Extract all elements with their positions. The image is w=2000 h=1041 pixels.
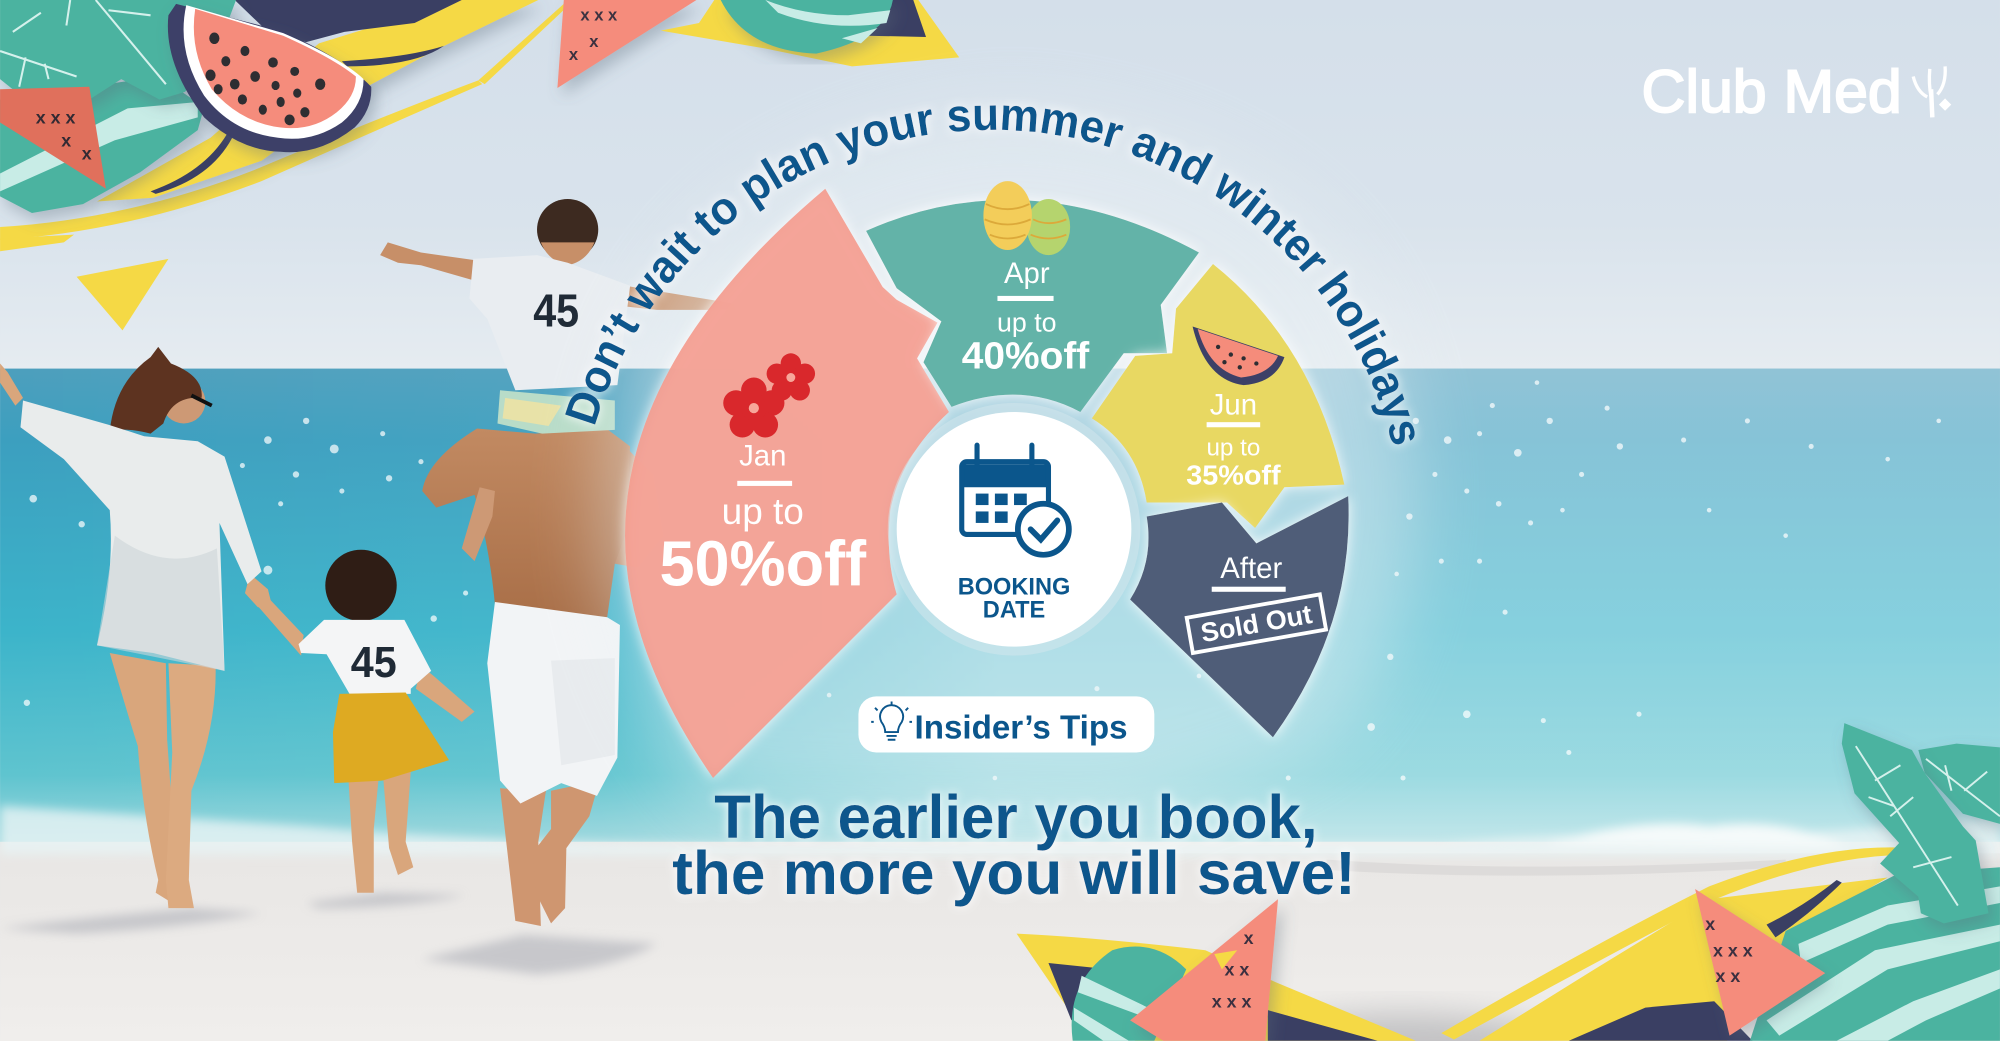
wedge: January bbox=[625, 189, 949, 778]
teal leaf large bbox=[1842, 723, 1988, 923]
woman head and hair bbox=[162, 380, 205, 423]
decoration: bottom-centre cluster: x x x bbox=[1212, 992, 1251, 1012]
navy triangle bbox=[867, 0, 926, 37]
month: Jun: Jun bbox=[1210, 389, 1257, 422]
yellow brush bbox=[97, 0, 538, 202]
leaf veins bbox=[1856, 746, 2000, 906]
decoration: top-left corner cluster bbox=[0, 0, 568, 251]
boy arms bbox=[380, 242, 475, 281]
girl jersey number: 45 bbox=[351, 639, 397, 687]
coral triangle bbox=[1130, 899, 1278, 1041]
father white pants bbox=[487, 602, 620, 804]
boy shirt bbox=[469, 255, 630, 390]
father legs bbox=[500, 788, 546, 926]
girl arms bbox=[248, 589, 304, 656]
boy shorts bbox=[497, 390, 615, 434]
triangle seeds: x bbox=[1705, 914, 1715, 934]
teal leaves bbox=[0, 0, 236, 99]
yellow brush bbox=[661, 0, 959, 66]
icon: easter eggs bbox=[983, 181, 1070, 255]
photo: woman running bbox=[0, 347, 273, 908]
label: Insider’s Tips bbox=[915, 709, 1128, 746]
background: shore foam bbox=[0, 806, 2000, 857]
teal melon bbox=[721, 0, 893, 54]
navy patch bbox=[1569, 880, 1842, 1041]
decoration: bottom-centre cluster: x x bbox=[1224, 960, 1249, 980]
father far arm bbox=[615, 446, 663, 568]
decoration: bottom-right cluster: x x bbox=[1716, 966, 1740, 986]
curved headline: Don’t wait to plan your summer and winter holidays bbox=[562, 104, 1420, 450]
photo: father carrying boy bbox=[380, 199, 736, 926]
melon stripes bbox=[765, 0, 890, 43]
boy legs bbox=[462, 487, 495, 561]
decoration: top coral triangle: x bbox=[569, 45, 579, 64]
girl shirt bbox=[299, 620, 431, 694]
stamp: Sold Out bbox=[1187, 594, 1326, 653]
label: up to: up to bbox=[722, 491, 804, 532]
coral triangle with seeds bbox=[0, 87, 106, 189]
decoration: bottom-centre cluster bbox=[1017, 899, 1416, 1041]
yellow swoosh lines bbox=[0, 80, 482, 240]
decoration: top coral triangle: x x x bbox=[580, 5, 618, 24]
wedge: After bbox=[1130, 496, 1349, 737]
soft light halo behind wheel bbox=[600, 108, 1416, 816]
divider bbox=[997, 296, 1054, 301]
decoration: bottom-centre cluster: x bbox=[1244, 928, 1254, 948]
woman legs bbox=[110, 653, 176, 903]
label: booking date: DATE bbox=[983, 596, 1045, 622]
background: water sparkles bbox=[24, 380, 1941, 781]
watermelon rind bbox=[168, 4, 371, 152]
decoration: bottom-right cluster: x x x bbox=[1713, 941, 1753, 961]
background: sky bbox=[0, 0, 2000, 372]
navy patch bbox=[1048, 963, 1378, 1041]
decoration: yellow triangle bbox=[77, 259, 168, 330]
background: sand bbox=[0, 842, 2000, 1041]
decoration: bottom-right cluster bbox=[1441, 723, 2000, 1041]
yellow brush bbox=[1017, 934, 1416, 1041]
decoration: top-left corner cluster: x bbox=[82, 143, 92, 163]
pale melon stripes bbox=[1074, 976, 1161, 1041]
background: washed light overlay bbox=[0, 369, 2000, 853]
decoration: top coral triangle: x bbox=[589, 32, 599, 51]
month: Jan: Jan bbox=[739, 440, 786, 473]
navy brush bbox=[235, 0, 462, 42]
girl skirt bbox=[333, 693, 449, 783]
leaf veins bbox=[0, 0, 166, 87]
divider bbox=[737, 481, 792, 486]
main slogan: the more you will save! bbox=[672, 839, 1356, 907]
month: Apr: Apr bbox=[1004, 257, 1050, 290]
centre hub bbox=[888, 403, 1140, 656]
teal body bbox=[0, 77, 204, 213]
divider bbox=[1207, 422, 1260, 427]
teal leaf right bbox=[1918, 744, 2000, 824]
label: booking date bbox=[958, 573, 1070, 622]
logo: Club Med: Club Med bbox=[1642, 58, 1902, 125]
decoration: big watermelon slice bbox=[168, 4, 371, 152]
watermelon flesh bbox=[194, 9, 356, 128]
boy jersey number: 45 bbox=[533, 285, 579, 337]
girl legs bbox=[348, 775, 379, 893]
discount: 35%off: 35%off bbox=[1186, 460, 1281, 491]
decoration: top-left corner cluster: x bbox=[61, 131, 71, 151]
divider bbox=[1212, 587, 1286, 592]
icon: calendar bbox=[960, 445, 1069, 555]
father back bbox=[422, 427, 630, 617]
boy head bbox=[537, 199, 598, 260]
label: up to: up to bbox=[1206, 434, 1260, 461]
watermelon white rim bbox=[184, 5, 364, 139]
decoration: top-right brush and melon bbox=[661, 0, 959, 66]
decoration: bottom soft shadow bbox=[1237, 1013, 1569, 1041]
girl hair bbox=[325, 550, 397, 621]
icon: lightbulb bbox=[871, 701, 912, 740]
teal melon bbox=[1072, 947, 1186, 1041]
thin yellow lines bbox=[1441, 847, 1913, 1039]
main slogan: The earlier you book, bbox=[714, 783, 1318, 851]
photo: girl running bbox=[248, 550, 475, 893]
pale teal stripes bbox=[0, 102, 198, 191]
watermelon seeds bbox=[205, 33, 325, 125]
wedge: June bbox=[1092, 264, 1344, 528]
stamp: Sold Out: Sold Out bbox=[1198, 599, 1314, 648]
pale melon stripes bbox=[1767, 886, 2000, 1041]
decoration: top coral triangle bbox=[557, 0, 696, 88]
icon: trident bbox=[1913, 66, 1949, 117]
background: sand texture band bbox=[1327, 860, 1786, 876]
label: booking date: BOOKING bbox=[958, 573, 1070, 599]
month: After: After bbox=[1220, 552, 1282, 585]
label: up to: up to bbox=[997, 308, 1057, 338]
insider's tips pill bbox=[858, 696, 1154, 752]
decoration: top-left corner cluster: x x x bbox=[36, 108, 76, 128]
woman sheer shirt bbox=[20, 400, 262, 671]
main slogan bbox=[672, 783, 1356, 907]
coral triangle bbox=[1695, 889, 1825, 1036]
beach shadows bbox=[0, 893, 657, 974]
icon: small watermelon bbox=[1193, 327, 1284, 385]
yellow brush bbox=[1480, 877, 1888, 1041]
wedge: April bbox=[866, 181, 1199, 412]
woman raised arm and skin bbox=[0, 363, 23, 406]
icon: plum blossoms bbox=[723, 353, 815, 437]
discount: 40%off: 40%off bbox=[962, 335, 1090, 378]
discount: 50%off: 50%off bbox=[659, 527, 867, 599]
triangle seeds bbox=[1214, 950, 1237, 969]
booking wheel bbox=[625, 181, 1349, 778]
background: sea bbox=[0, 369, 2000, 847]
teal melon bbox=[1750, 867, 2000, 1041]
